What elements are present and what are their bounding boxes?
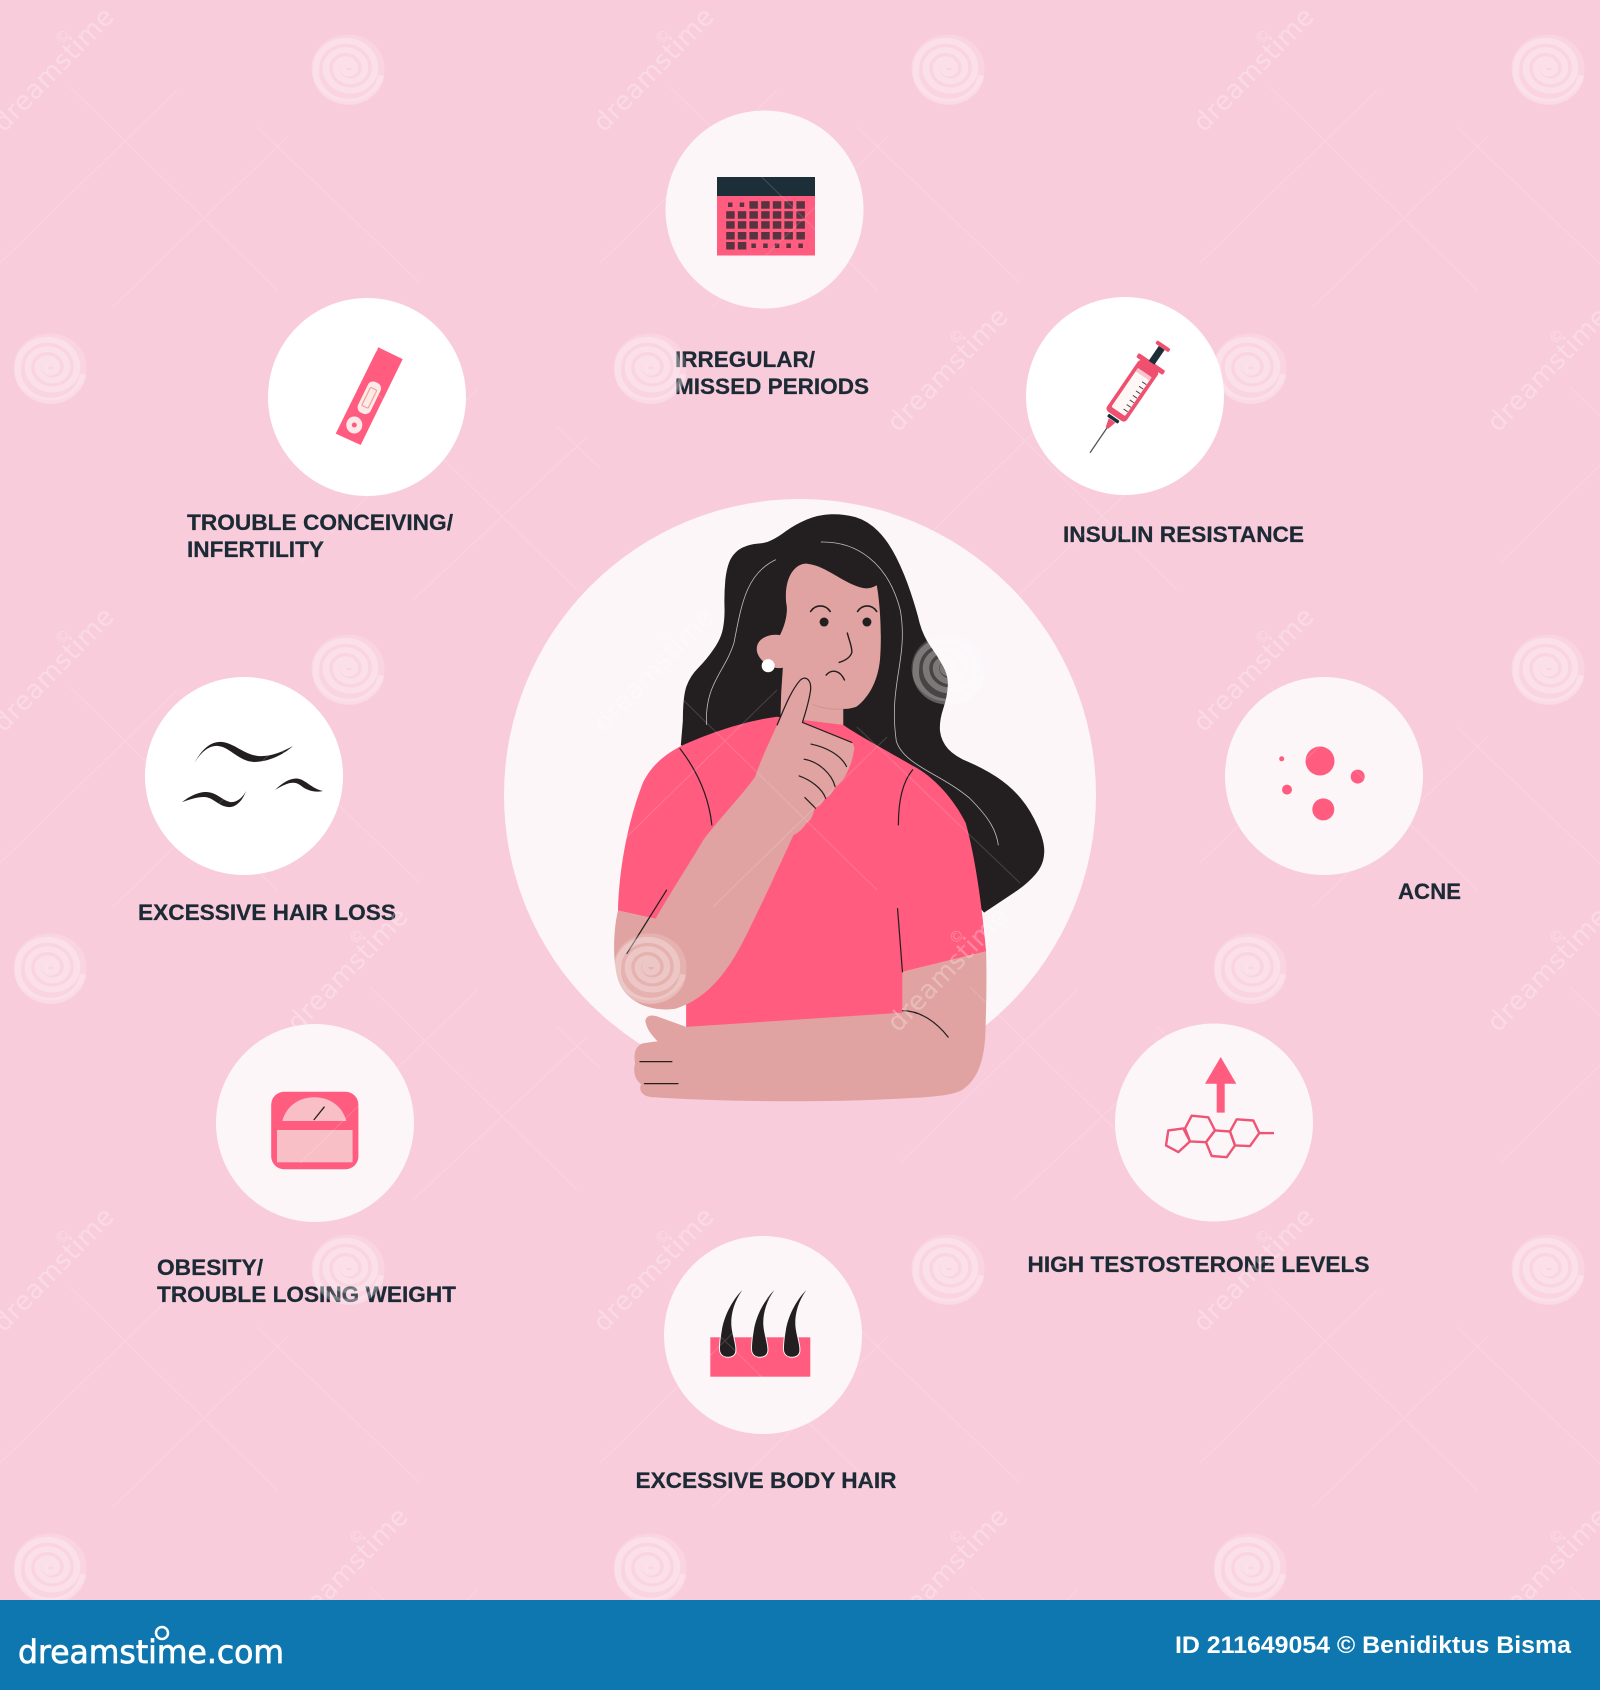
watermark overlay: © xyxy=(51,1225,74,1248)
earring xyxy=(762,659,775,672)
circle xyxy=(1225,677,1423,875)
face and neck xyxy=(757,564,881,733)
watermark overlay: dreamstime xyxy=(282,1502,414,1638)
raised arm and hand xyxy=(614,678,854,1009)
label: INSULIN RESISTANCE xyxy=(1063,522,1304,547)
footer logo mark xyxy=(156,1627,168,1639)
panel: high testosterone xyxy=(1028,1024,1370,1277)
woman illustration xyxy=(614,514,1044,1101)
label: TROUBLE LOSING WEIGHT xyxy=(157,1282,457,1307)
label: EXCESSIVE HAIR LOSS xyxy=(138,900,396,925)
label: IRREGULAR/ xyxy=(675,347,815,372)
watermark overlay: © xyxy=(945,1525,968,1548)
shirt xyxy=(618,717,986,1029)
watermark overlay: dreamstime xyxy=(282,902,414,1038)
footer logo: dreamstime.com xyxy=(18,1633,284,1671)
icon: hair follicles xyxy=(710,1290,810,1377)
circle xyxy=(664,1236,862,1434)
circle xyxy=(145,677,343,875)
watermark overlay: © xyxy=(345,1525,368,1548)
circle xyxy=(1115,1024,1313,1222)
circle xyxy=(666,110,864,308)
panel: irregular periods xyxy=(666,110,869,399)
watermark overlay: dreamstime xyxy=(588,1202,720,1338)
hair strands xyxy=(706,560,776,725)
icon: calendar xyxy=(717,177,815,256)
watermark overlay: © xyxy=(1545,325,1568,348)
watermark overlay: dreamstime xyxy=(588,602,720,738)
watermark overlay: dreamstime xyxy=(588,2,720,138)
watermark overlay: dreamstime xyxy=(882,902,1014,1038)
watermark overlay: © xyxy=(1545,1525,1568,1548)
label: ACNE xyxy=(1398,879,1461,904)
icon: syringe xyxy=(1077,336,1177,462)
label: INFERTILITY xyxy=(187,537,324,562)
watermark overlay: dreamstime xyxy=(882,302,1014,438)
icon: molecule xyxy=(1166,1116,1274,1157)
body lines xyxy=(627,678,948,1084)
label: MISSED PERIODS xyxy=(675,374,869,399)
folded arm and hand xyxy=(634,951,986,1101)
panel: obesity xyxy=(157,1024,457,1307)
circle xyxy=(268,298,466,496)
watermark overlay: © xyxy=(945,925,968,948)
panel: acne xyxy=(1225,677,1461,904)
watermark overlay: © xyxy=(651,625,674,648)
watermark overlay: © xyxy=(1251,625,1274,648)
watermark overlay: © xyxy=(51,625,74,648)
watermark overlay: dreamstime xyxy=(282,302,414,438)
panel: excessive hair loss xyxy=(138,677,396,925)
icon: test strip xyxy=(336,347,403,445)
face features xyxy=(811,606,877,680)
watermark overlay: © xyxy=(945,325,968,348)
watermark overlay: © xyxy=(345,325,368,348)
icon: hair strands xyxy=(182,742,323,807)
label: HIGH TESTOSTERONE LEVELS xyxy=(1028,1252,1370,1277)
label: EXCESSIVE BODY HAIR xyxy=(636,1468,897,1493)
jaw shadow xyxy=(813,704,843,709)
panel: trouble conceiving xyxy=(187,298,466,562)
label: TROUBLE CONCEIVING/ xyxy=(187,510,453,535)
icon: weighing scale xyxy=(271,1092,358,1169)
circle xyxy=(1026,297,1224,495)
footer bar xyxy=(0,1600,1600,1690)
watermark overlay: dreamstime xyxy=(882,1502,1014,1638)
panel: excessive body hair xyxy=(636,1236,897,1493)
hair xyxy=(681,514,1044,913)
watermark overlay: © xyxy=(651,25,674,48)
watermark overlay: dreamstime xyxy=(1188,1202,1320,1338)
panel: insulin resistance xyxy=(1026,297,1304,547)
watermark overlay: © xyxy=(1251,25,1274,48)
central circle xyxy=(504,499,1096,1091)
watermark overlay: dreamstime xyxy=(1188,602,1320,738)
watermark overlay: © xyxy=(651,1225,674,1248)
label: OBESITY/ xyxy=(157,1255,263,1280)
icon: acne spots xyxy=(1279,746,1365,820)
watermark overlay: © xyxy=(1251,1225,1274,1248)
watermark overlay: © xyxy=(51,25,74,48)
panel: central figure xyxy=(504,499,1096,1101)
icon: arrow up xyxy=(1205,1057,1236,1113)
watermark overlay: © xyxy=(345,925,368,948)
footer credit: ID 211649054 © Benidiktus Bisma xyxy=(1175,1632,1572,1659)
watermark overlay: © xyxy=(1545,925,1568,948)
watermark overlay: dreamstime xyxy=(1188,2,1320,138)
circle xyxy=(216,1024,414,1222)
